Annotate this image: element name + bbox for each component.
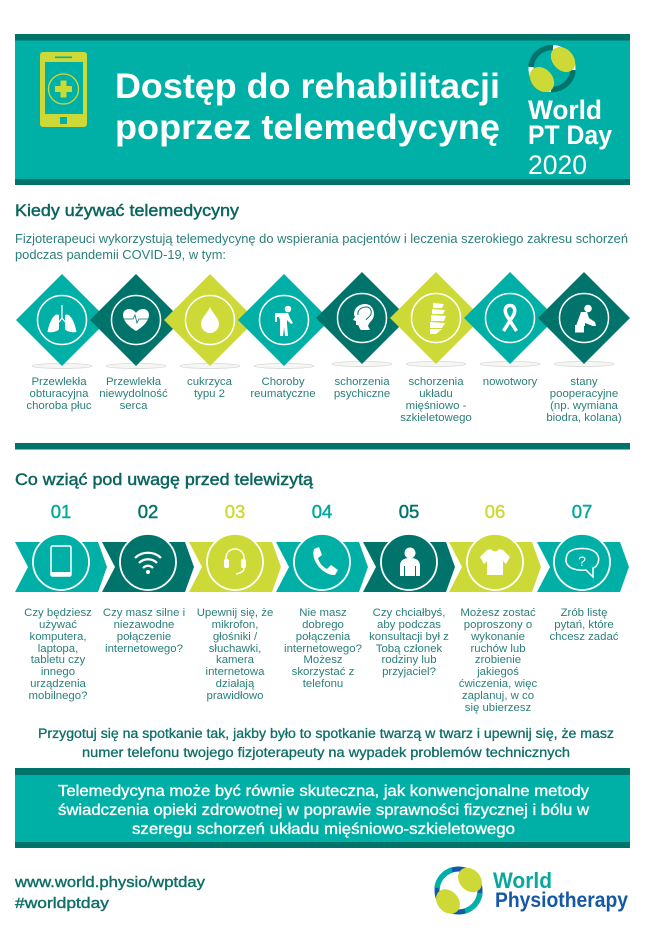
label: diabetes: typu 2 bbox=[194, 388, 225, 400]
text: step 06: ćwiczenia, więc bbox=[459, 678, 538, 690]
text: step 07: chcesz zadać bbox=[549, 631, 619, 643]
logo: World Physiotherapy bbox=[431, 863, 628, 919]
header banner bbox=[15, 34, 630, 185]
condition labels bbox=[26, 376, 622, 424]
condition: spine bbox=[390, 272, 482, 364]
step texts bbox=[24, 607, 619, 714]
label: psychiatric: psychiczne bbox=[334, 388, 390, 400]
step 07: question bubble: ? bbox=[578, 553, 586, 569]
text: step 03: prawidłowo bbox=[207, 690, 263, 702]
label: musculoskeletal: schorzenia bbox=[408, 376, 464, 388]
step 02: wifi: 02 bbox=[138, 501, 158, 522]
heading: Co wziąć pod uwagę przed telewizytą: Co wziąć pod uwagę przed telewizytą bbox=[15, 471, 314, 489]
text: step 05: Czy chciałbyś, bbox=[373, 607, 445, 619]
text: step 07: Zrób listę bbox=[561, 607, 607, 619]
step 03: headset: 03 bbox=[225, 501, 245, 522]
text: step 02: Czy masz silne i bbox=[103, 607, 185, 619]
preparation note: numer telefonu twojego fizjoterapeuty na wypadek problemów technicznych bbox=[82, 745, 570, 760]
text: step 03: głośniki / bbox=[213, 631, 258, 643]
label: heart failure: niewydolność bbox=[99, 388, 168, 400]
logo: World Physiotherapy: World bbox=[493, 868, 552, 893]
callout banner: szeregu schorzeń układu mięśniowo-szkieletowego bbox=[132, 821, 515, 838]
text: step 01: innego bbox=[41, 666, 75, 678]
intro text: podczas pandemii COVID-19, w tym: bbox=[15, 247, 226, 262]
text: step 06: Możesz zostać bbox=[460, 607, 536, 619]
footer links: www.world.physio/wptday bbox=[14, 874, 206, 891]
step 01: device: 01 bbox=[51, 501, 71, 522]
label: post-operative: stany bbox=[570, 376, 598, 388]
text: step 04: połączenia bbox=[296, 631, 351, 643]
text: step 04: telefonu bbox=[303, 678, 343, 690]
label: post-operative: pooperacyjne bbox=[550, 388, 618, 400]
text: step 01: Czy będziesz bbox=[24, 607, 92, 619]
text: step 02: niezawodne bbox=[114, 619, 174, 631]
condition: head with brain bbox=[316, 272, 408, 364]
text: step 06: jakiegoś bbox=[476, 666, 519, 678]
text: step 01: urządzenia bbox=[30, 678, 87, 690]
text: step 04: skorzystać z bbox=[292, 666, 355, 678]
step 05: companion: 05 bbox=[399, 501, 419, 522]
text: step 01: mobilnego? bbox=[29, 690, 87, 702]
label: COPD: obturacyjna bbox=[30, 388, 89, 400]
text: step 05: aby podczas bbox=[377, 619, 441, 631]
condition: heart bbox=[90, 274, 182, 366]
text: step 02: internetowego? bbox=[105, 643, 183, 655]
text: step 04: Możesz bbox=[303, 654, 343, 666]
text: step 01: używać bbox=[39, 619, 77, 631]
condition: drop bbox=[164, 274, 256, 366]
logo: World PT Day 2020: 2020 bbox=[528, 150, 587, 180]
text: step 06: wykonanie bbox=[470, 631, 525, 643]
callout banner: Telemedycyna może być równie skuteczna, jak konwencjonalne metody bbox=[58, 783, 589, 800]
text: step 06: zrobienie bbox=[475, 654, 521, 666]
text: step 04: dobrego bbox=[302, 619, 344, 631]
text: step 03: kamera bbox=[216, 654, 255, 666]
text: step 04: Nie masz bbox=[299, 607, 347, 619]
intro text: Fizjoterapeuci wykorzystują telemedycynę do wspierania pacjentów i leczenia szerokiego zakresu schorzeń bbox=[15, 231, 628, 246]
step 04: telephone bbox=[276, 501, 368, 592]
title: poprzez telemedycynę bbox=[115, 107, 500, 147]
callout banner bbox=[15, 768, 630, 848]
step 03: headset bbox=[189, 501, 281, 592]
step 06: t-shirt bbox=[449, 501, 541, 592]
text: step 03: internetowa bbox=[206, 666, 265, 678]
text: step 03: słuchawki, bbox=[209, 643, 261, 655]
logo: World PT Day 2020: World bbox=[528, 95, 602, 125]
condition: ribbon bbox=[464, 272, 556, 364]
label: post-operative: biodra, kolana) bbox=[546, 412, 622, 424]
text: step 03: działają bbox=[216, 678, 255, 690]
label: heart failure: serca bbox=[120, 400, 148, 412]
text: step 07: pytań, które bbox=[554, 619, 614, 631]
text: step 05: konsultacji był z bbox=[369, 631, 449, 643]
label: musculoskeletal: mięśniowo - bbox=[406, 400, 467, 412]
label: heart failure: Przewlekła bbox=[106, 376, 162, 388]
logo: World PT Day 2020: PT Day bbox=[528, 120, 612, 150]
step 01: device bbox=[15, 501, 107, 592]
label: rheumatic: Choroby bbox=[261, 376, 305, 388]
text: step 06: zaplanuj, w co bbox=[462, 690, 534, 702]
conditions diamonds row bbox=[16, 272, 630, 424]
text: step 03: Upewnij się, że bbox=[197, 607, 273, 619]
text: step 06: się ubierzesz bbox=[465, 702, 532, 714]
label: cancer: nowotwory bbox=[483, 376, 538, 388]
label: rheumatic: reumatyczne bbox=[250, 388, 316, 400]
text: step 05: rodziny lub bbox=[381, 654, 437, 666]
preparation note: Przygotuj się na spotkanie tak, jakby było to spotkanie twarzą w twarz i upewnij się, że masz bbox=[38, 726, 614, 741]
logo: World Physiotherapy: Physiotherapy bbox=[495, 889, 628, 912]
step 07: question bubble bbox=[537, 501, 629, 592]
steps row bbox=[15, 501, 629, 714]
title: Dostęp do rehabilitacji bbox=[115, 66, 500, 106]
condition: lungs bbox=[16, 274, 108, 366]
text: step 01: komputera, bbox=[30, 631, 86, 643]
icon: phone with medical cross bbox=[40, 52, 87, 127]
text: step 06: ruchów lub bbox=[470, 643, 526, 655]
label: post-operative: (np. wymiana bbox=[550, 400, 619, 412]
label: psychiatric: schorzenia bbox=[334, 376, 390, 388]
label: diabetes: cukrzyca bbox=[187, 376, 233, 388]
step 05: companion bbox=[363, 501, 455, 592]
step 04: telephone: 04 bbox=[312, 501, 332, 522]
text: step 04: internetowego? bbox=[284, 643, 362, 655]
heading: Kiedy używać telemedycyny: Kiedy używać telemedycyny bbox=[15, 202, 240, 220]
text: step 05: przyjaciel? bbox=[382, 666, 436, 678]
label: COPD: Przewlekła bbox=[31, 376, 87, 388]
text: step 03: mikrofon, bbox=[212, 619, 258, 631]
text: step 02: połączenie bbox=[117, 631, 171, 643]
logo: World PT Day 2020 bbox=[525, 42, 612, 180]
condition: seated person bbox=[538, 272, 630, 364]
label: musculoskeletal: szkieletowego bbox=[400, 412, 472, 424]
label: COPD: choroba płuc bbox=[26, 400, 92, 412]
label: musculoskeletal: układu bbox=[419, 388, 453, 400]
text: step 01: tabletu czy bbox=[31, 654, 86, 666]
text: step 01: laptopa, bbox=[38, 643, 78, 655]
footer links: #worldptday bbox=[15, 895, 110, 912]
text: step 05: Tobą członek bbox=[376, 643, 443, 655]
text: step 06: poproszony o bbox=[464, 619, 532, 631]
step 06: t-shirt: 06 bbox=[485, 501, 505, 522]
step 07: question bubble: 07 bbox=[572, 501, 592, 522]
step 02: wifi bbox=[102, 501, 194, 592]
condition: walking person bbox=[238, 274, 330, 366]
callout banner: świadczenia opieki zdrowotnej w poprawie sprawności fizycznej i bólu w bbox=[58, 802, 590, 819]
